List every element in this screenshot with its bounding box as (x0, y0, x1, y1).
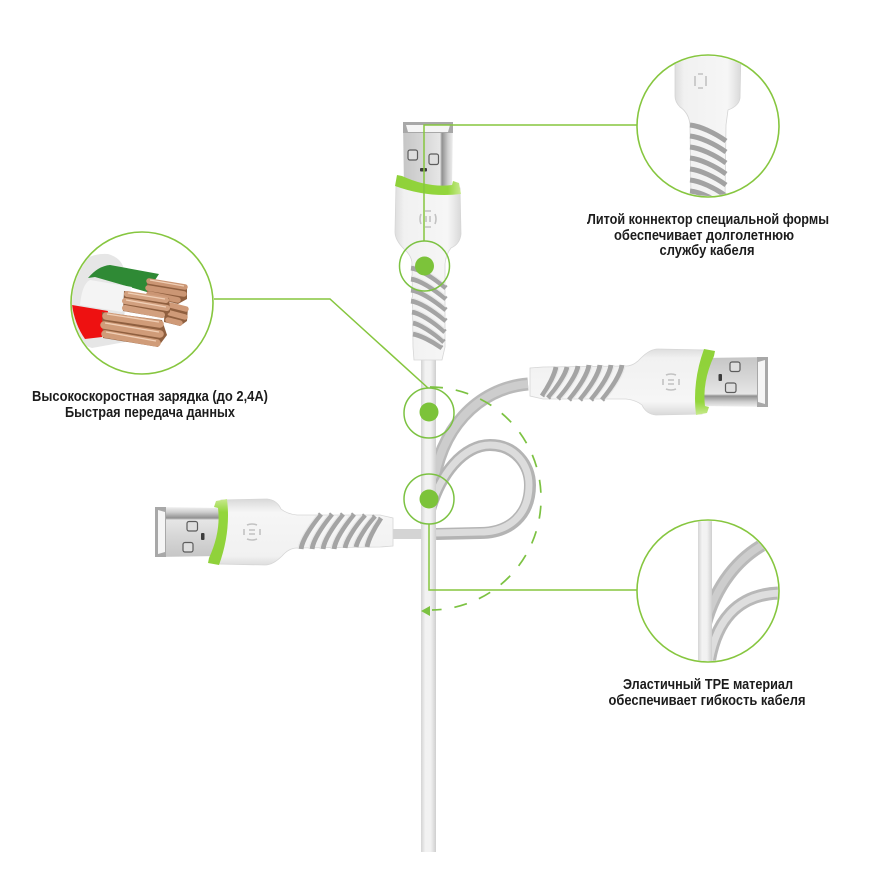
cable sheath (72, 254, 125, 348)
caption: TPE material (608, 676, 806, 709)
white wire copper (123, 291, 170, 318)
connector: top (395, 122, 461, 360)
caption: fast charging: Высокоскоростная зарядка (до 2,4А) (32, 388, 268, 405)
white wire (80, 280, 132, 312)
upper curved cable (433, 384, 528, 490)
caption: fast charging (32, 388, 268, 421)
caption: fast charging: Быстрая передача данных (65, 404, 236, 421)
caption: molded connector: службу кабеля (660, 242, 754, 259)
connector: left (155, 499, 393, 565)
marker: cable lower (404, 474, 454, 524)
marker: connector neck (400, 241, 450, 291)
green wire copper (147, 279, 187, 304)
connector: right (530, 349, 768, 415)
detail circle: flexible cable (637, 515, 780, 670)
dashed bend arc with arrow (421, 387, 541, 616)
caption: TPE material: обеспечивает гибкость кабеля (608, 692, 806, 709)
caption: molded connector: обеспечивает долголетнюю (614, 227, 794, 244)
green wire (88, 265, 159, 292)
back copper bundle (164, 302, 188, 326)
left stub of looped cable (393, 529, 423, 539)
caption: molded connector (587, 211, 829, 259)
caption: TPE material: Эластичный TPE материал (623, 676, 793, 693)
copper highlights (105, 280, 184, 341)
leader lines (214, 125, 637, 590)
caption: molded connector: Литой коннектор специальной формы (587, 211, 829, 228)
main vertical cable (421, 360, 436, 852)
detail circle: copper wires (60, 232, 213, 374)
detail circle: connector (637, 50, 779, 207)
looped cable (426, 445, 530, 534)
red wire copper (102, 312, 167, 347)
red wire (72, 305, 108, 339)
marker: cable upper (404, 388, 454, 438)
